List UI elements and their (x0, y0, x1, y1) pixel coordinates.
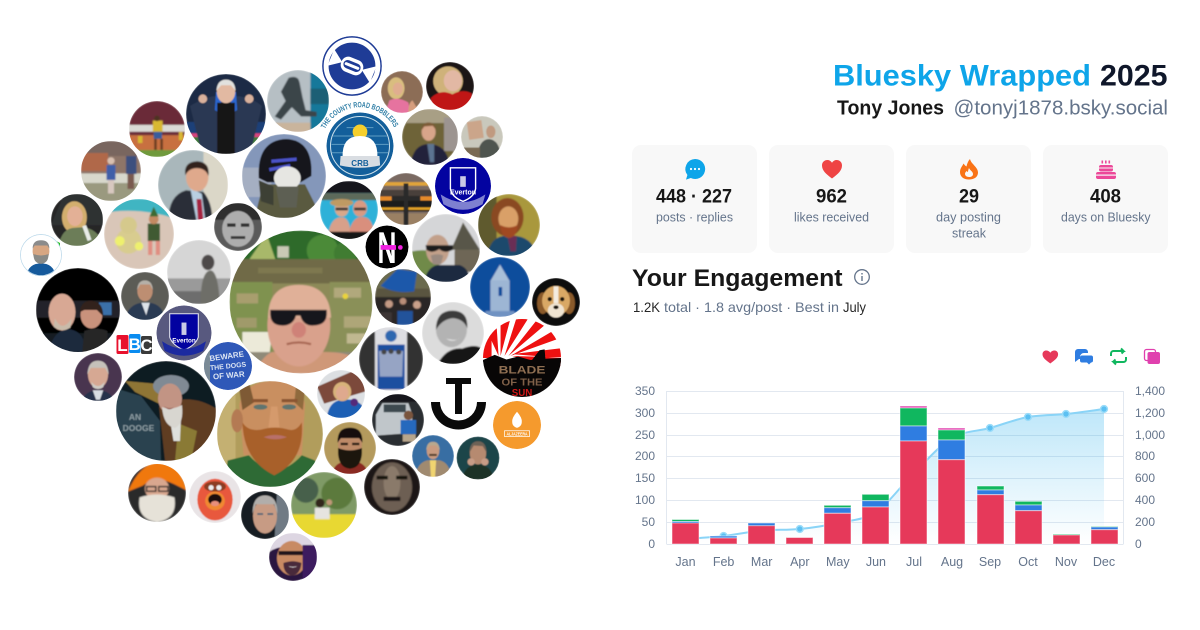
logo: Toffee Blues (322, 36, 382, 96)
stat label, second line: streak (952, 226, 986, 240)
stat number: 962 (816, 186, 847, 208)
avatar: fighter pilot (242, 134, 326, 218)
avatar: man with glasses, purple tint (269, 533, 317, 581)
month labels: Apr (790, 555, 810, 569)
left axis labels: 100 (635, 493, 655, 507)
right axis labels (1135, 384, 1165, 551)
panel: days on Bluesky stat (1043, 145, 1168, 253)
month labels: Jan (675, 555, 696, 569)
month labels: Jul (906, 555, 922, 569)
avatar: man by armoured truck (372, 394, 424, 446)
avatar: person in yellow field (291, 472, 357, 538)
panel: likes stat (769, 145, 894, 253)
logo: LBC: B (129, 335, 141, 354)
cumulative line (686, 409, 1104, 539)
avatar: Scrooge actor: DOOGE (123, 423, 155, 433)
avatar: manager in blue coat (186, 74, 266, 154)
left axis labels: 350 (635, 384, 655, 398)
Dec bar (1091, 526, 1118, 544)
logo: Al Jazeera (493, 401, 541, 449)
Apr bar (786, 538, 813, 544)
user name and handle (837, 98, 1168, 120)
avatar: blue tower (470, 257, 530, 317)
left axis labels: 250 (635, 428, 655, 442)
avatar: man covering mouth (456, 436, 500, 480)
stat number: 408 (1090, 186, 1121, 208)
avatar: woman in red scarf (426, 62, 474, 110)
avatar: ginger-bearded man (217, 381, 323, 487)
month labels: Feb (713, 555, 734, 569)
avatar: snowman and elf (104, 199, 174, 269)
icon: heart (822, 160, 842, 178)
logo: Everton crest, grey surround: Everton (172, 338, 196, 345)
right axis labels: 600 (1135, 471, 1155, 485)
left axis labels: 0 (648, 537, 655, 551)
avatar: Blade of the Sun poster: OF THE (502, 377, 543, 388)
month labels (675, 555, 1115, 569)
left axis labels: 150 (635, 471, 655, 485)
logo: N: N (378, 224, 396, 273)
month labels: Nov (1055, 555, 1078, 569)
logo: LBC: L (117, 336, 128, 355)
avatar: Santa beard in orange hat (128, 463, 186, 522)
left axis labels: 300 (635, 406, 655, 420)
avatar: man in purple background (74, 353, 122, 401)
month labels: Jun (866, 555, 886, 569)
May bar (824, 505, 851, 544)
line data points (720, 406, 1107, 539)
avatar: man with poster (461, 116, 503, 158)
panel: streak stat (906, 145, 1031, 253)
avatar: man in tan jacket (412, 435, 454, 477)
avatar: footballer mural (267, 70, 329, 132)
stat number: 29 (959, 186, 979, 208)
right axis labels: 200 (1135, 515, 1155, 529)
heading: Your Engagement: Your Engagement (632, 265, 843, 292)
avatar: Beware the Dogs of War: OF WAR (213, 370, 245, 381)
stacked bars (672, 406, 1118, 544)
left axis labels: 50 (642, 515, 655, 529)
right axis labels: 1,000 (1135, 428, 1165, 442)
avatar: bearded man (324, 422, 376, 474)
Jun bar (862, 494, 889, 544)
stat label: days on Bluesky (1061, 210, 1151, 224)
logo: County Road Bobblers (320, 102, 398, 180)
icon: likes (1042, 350, 1058, 364)
stat label: likes received (794, 210, 869, 224)
month labels: Mar (751, 555, 772, 569)
icon: flame (960, 159, 978, 180)
Aug bar (938, 428, 965, 544)
avatar: older man (241, 491, 289, 539)
logo: N (366, 226, 408, 268)
avatar: Beware the Dogs of War (204, 342, 252, 390)
avatar: old man black and white (214, 203, 262, 251)
avatar: man in restaurant (402, 109, 458, 165)
avatar: cartoon man (20, 234, 62, 276)
Feb bar (710, 536, 737, 544)
right axis labels: 800 (1135, 449, 1155, 463)
icon: cake (1096, 160, 1116, 179)
Jan bar (672, 520, 699, 544)
cumulative area (686, 409, 1104, 544)
icon: replies (1075, 349, 1093, 364)
title: 2025 (1100, 60, 1168, 92)
avatar: cross at sunset (380, 173, 432, 225)
avatar: Blade of the Sun poster: SUN (512, 388, 532, 399)
icon: chat bubble (685, 159, 705, 180)
avatar: Blade of the Sun poster (483, 319, 561, 399)
logo: Everton crest, deep blue: Everton (450, 189, 476, 196)
logo: County Road Bobblers: CRB (351, 159, 369, 168)
avatar: man in profile, greyscale (167, 240, 231, 304)
Sep bar (977, 486, 1004, 544)
avatar: football crowd (81, 141, 141, 201)
panel: posts and replies stat (632, 145, 757, 253)
engagement summary: July (843, 299, 866, 315)
avatar: main portrait, bald man in sunglasses (230, 230, 372, 374)
avatar: man in grey suit (121, 272, 169, 320)
month labels: Oct (1018, 555, 1038, 569)
stat label: day posting (936, 210, 1001, 224)
Nov bar (1053, 534, 1080, 544)
avatar: couple in pool (320, 181, 378, 240)
month labels: Sep (979, 555, 1001, 569)
month labels: Aug (941, 555, 963, 569)
avatar: smiling man, greyscale (422, 302, 484, 364)
avatar: lawyer in suit (158, 150, 228, 220)
title: Bluesky Wrapped (833, 60, 1091, 92)
Jul bar (900, 406, 927, 544)
avatar: dark sepia face (364, 459, 420, 515)
icon: reposts (1111, 348, 1126, 364)
left axis labels: 200 (635, 449, 655, 463)
stat number: 448 · 227 (656, 186, 732, 208)
avatar: Animal muppet (189, 471, 241, 523)
logo: Everton crest, deep blue (435, 158, 491, 214)
user name and handle: @tonyj1878.bsky.social (954, 98, 1168, 120)
avatar: Blade of the Sun poster: BLADE (499, 365, 546, 377)
chart legend icons (1042, 348, 1160, 364)
avatar: crowd with blue flag (375, 269, 431, 325)
logo: County Road Bobblers: THE COUNTY ROAD BOBBLERS (320, 102, 398, 128)
right axis labels: 1,400 (1135, 384, 1165, 398)
logo: LBC (116, 334, 153, 355)
user name and handle: Tony Jones (837, 98, 944, 120)
panel: avatar bubble cluster (20, 36, 580, 581)
right axis labels: 1,200 (1135, 406, 1165, 420)
avatar: Brazil footballers (129, 101, 185, 157)
avatar: stained-glass window (359, 327, 423, 391)
chart grid and axes (666, 391, 1124, 544)
icon: quotes (1144, 350, 1160, 364)
right axis labels: 0 (1135, 537, 1142, 551)
engagement summary: 1.2K (633, 299, 661, 315)
logo: Al Jazeera: ALJAZEERA (506, 431, 528, 436)
avatar: couple at night (36, 268, 120, 354)
stat label: posts · replies (656, 210, 733, 224)
avatar: blonde woman in pink (381, 71, 423, 113)
left axis labels (635, 384, 655, 551)
avatar: woman in car (51, 194, 103, 246)
logo: T anchor (431, 378, 486, 429)
month labels: Dec (1093, 555, 1115, 569)
avatar: Beware the Dogs of War: BEWARE (209, 350, 244, 363)
avatar: Beware the Dogs of War: THE DOGS (210, 361, 247, 372)
avatar: puppy (532, 278, 580, 326)
avatar: cartoon bearded man (478, 194, 540, 256)
Oct bar (1015, 501, 1042, 544)
logo: LBC: C (140, 336, 153, 355)
avatar: Scrooge actor: AN (129, 412, 141, 422)
avatar: man in sunglasses by stone hut (412, 214, 480, 282)
logo: Everton crest, grey surround (156, 306, 212, 360)
Mar bar (748, 523, 775, 544)
chart: monthly engagement (635, 384, 1165, 569)
avatar: woman in blue top (317, 370, 365, 418)
right axis labels: 400 (1135, 493, 1155, 507)
avatar: Scrooge actor (116, 361, 216, 461)
engagement summary: total · 1.8 avg/post · Best in (664, 299, 839, 315)
icon: info (855, 270, 869, 284)
month labels: May (826, 555, 850, 569)
